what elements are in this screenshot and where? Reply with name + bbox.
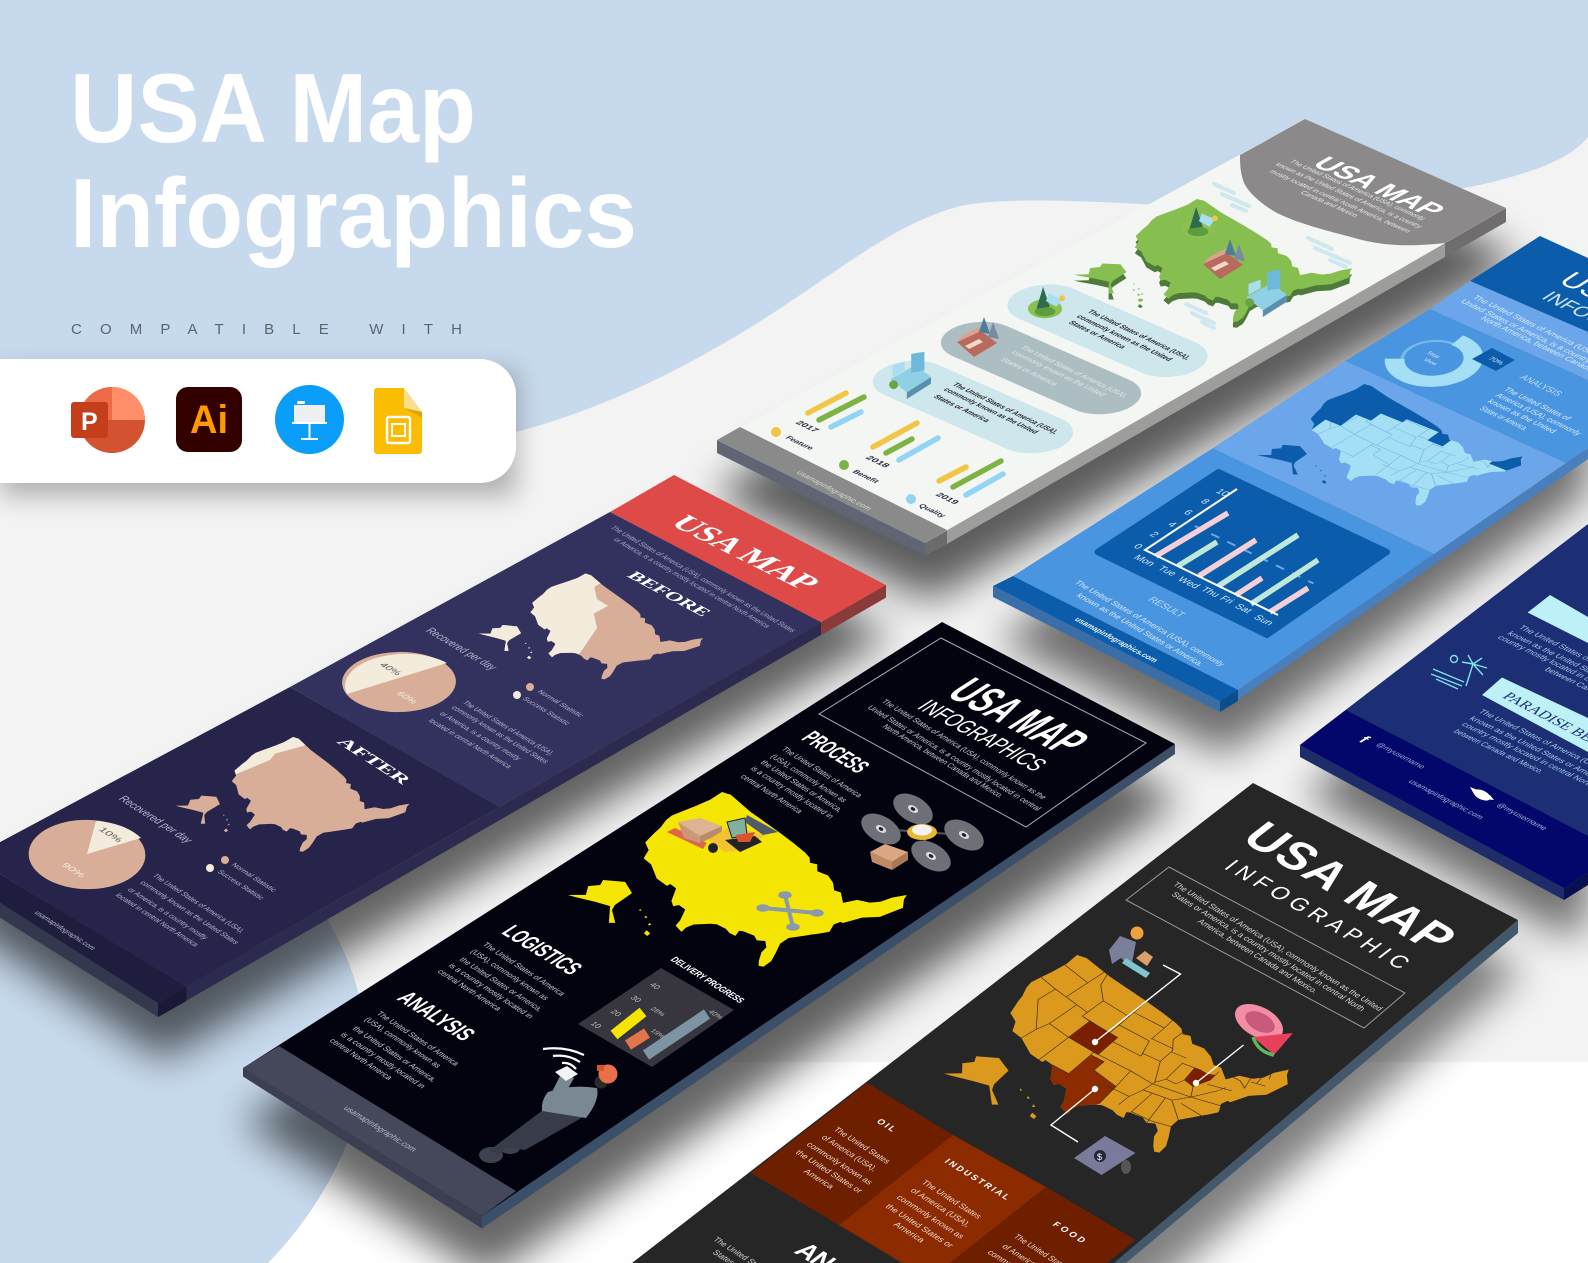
title: Infographics	[70, 158, 637, 268]
legend before	[513, 683, 586, 727]
before paragraph: or America, is a country mostly	[437, 711, 523, 761]
bar chart: yearly bars: 2018	[863, 454, 893, 469]
intro paragraph: The United States of America (USA), commonly known as the United States	[608, 525, 798, 633]
footer social links: @myusername	[1494, 802, 1550, 832]
panel: navy infographic card	[1300, 524, 1588, 938]
process text: (USA), commonly known as	[768, 753, 850, 804]
donut chart: 70%	[1486, 356, 1505, 366]
analysis text	[327, 988, 481, 1090]
logistics text: (USA), commonly known as	[468, 948, 551, 1001]
header paragraph: mostly located in central North America, between	[1267, 169, 1413, 234]
recovered label before: Recovered per day	[422, 626, 501, 672]
heading: USA MAP	[1306, 153, 1452, 220]
panel: oil	[751, 1083, 953, 1225]
icon: small drone	[757, 892, 823, 930]
result text: RESULT	[1145, 596, 1187, 619]
map: before	[478, 574, 703, 680]
logistics text	[435, 922, 588, 1020]
footer band	[0, 870, 186, 1003]
analysis heading and text	[710, 1235, 912, 1263]
before paragraph: located in central North America	[426, 718, 514, 770]
before paragraph	[426, 700, 557, 770]
analysis text: central North America	[327, 1037, 395, 1081]
panel: oil: America	[801, 1167, 837, 1191]
footer band	[717, 427, 947, 543]
legend before: Normal Statistic	[535, 689, 586, 719]
legend after: Success Statistic	[215, 869, 267, 901]
bar chart: result: Thu	[1197, 586, 1222, 599]
after paragraph: commonly known as the United States	[138, 880, 241, 946]
panel: oil: commonly known as	[804, 1140, 875, 1186]
icon: delivery drone	[856, 787, 989, 878]
analysis text: the United States or America,	[350, 1025, 439, 1083]
logistics text: is a country mostly located in	[446, 962, 536, 1020]
bar chart: delivery progress: 19%	[648, 1028, 666, 1040]
footer band: usamapinfographic.com	[794, 470, 874, 512]
footer social links: usamapinfographic.com	[1406, 778, 1486, 821]
panel: industrial: of America (USA),	[908, 1186, 973, 1228]
icon: oil canister	[1074, 1136, 1136, 1175]
legend after: Normal Statistic	[229, 862, 279, 893]
bar chart: delivery progress: 28%	[648, 1006, 666, 1018]
band: header	[1470, 236, 1588, 332]
pill: item two: States or America	[998, 357, 1061, 387]
illustration: person with tablet	[479, 1048, 618, 1163]
intro paragraph: States or America, is a country mostly located in central North	[1169, 890, 1368, 1013]
bar chart: result: 2	[1146, 531, 1161, 539]
top heading box	[1528, 595, 1588, 643]
footer url: usamapinfographic.com	[341, 1104, 419, 1153]
panel: software icons	[0, 359, 516, 496]
bar chart: delivery progress: 40	[647, 981, 663, 991]
panel: oil: The United States	[831, 1125, 893, 1165]
process text: the United States or America,	[758, 759, 846, 813]
analysis text	[1477, 374, 1585, 437]
logistics text: central North America	[435, 968, 504, 1012]
process text: is a country mostly located in	[748, 765, 837, 820]
before paragraph: The United States of America (USA),	[460, 700, 557, 756]
map: green USA	[1066, 195, 1369, 353]
map: yellow USA	[558, 786, 927, 1002]
bar chart: result: Wed	[1174, 576, 1202, 590]
icon: oil canister: $	[1097, 1152, 1102, 1162]
panel: black logistics infographic card	[243, 622, 1180, 1263]
icon: fruit	[1229, 997, 1293, 1055]
pie chart: after: 90%	[59, 861, 88, 879]
panel: dark orange map infographic card	[632, 783, 1523, 1263]
panel: oil: OIL	[874, 1117, 899, 1133]
header band	[610, 475, 886, 622]
icon: palm beach	[1431, 655, 1487, 689]
icon: PowerPoint	[71, 387, 145, 453]
pie chart: after	[4, 806, 170, 903]
intro paragraph: America, between Canada and Mexico.	[1195, 917, 1321, 995]
band: donut	[1345, 309, 1588, 463]
heading: USA MAP	[936, 671, 1101, 762]
intro paragraph	[608, 525, 798, 633]
panel: oil: of America (USA),	[819, 1133, 880, 1173]
bar chart: delivery progress: 30	[628, 994, 644, 1004]
panel: industrial	[839, 1135, 1046, 1263]
after heading: AFTER	[333, 735, 416, 787]
bar chart: result: 0	[1130, 543, 1145, 551]
pill: item three	[857, 352, 1089, 461]
bar chart: yearly bars: 2019	[933, 491, 962, 506]
header paragraph: Canada and Mexico.	[1298, 190, 1363, 219]
bar chart: yearly bars: 2017	[793, 419, 822, 434]
panel: industrial: commonly known as	[894, 1193, 967, 1240]
result text: The United States of America (USA), commonly	[1072, 579, 1228, 668]
bar chart: result: Sun	[1250, 614, 1276, 627]
donut chart: View	[1421, 358, 1439, 367]
after paragraph: or America, is a country mostly	[125, 887, 210, 941]
footer url: usamapinfographics.com	[1072, 616, 1161, 664]
panel: industrial: the United States or	[883, 1202, 956, 1249]
legend after	[206, 856, 279, 901]
pill: item one: commonly known as the United	[1074, 314, 1175, 362]
bar chart: result: 6	[1180, 509, 1195, 517]
analysis text: States or America.	[1477, 405, 1532, 432]
logistics text: the United States or America,	[457, 956, 546, 1013]
footer band	[1300, 710, 1588, 888]
bar chart: delivery progress: 10	[588, 1020, 604, 1030]
icon: Illustrator	[176, 387, 242, 452]
bar chart: result: Fri	[1216, 595, 1236, 606]
clouds	[1186, 184, 1350, 328]
intro paragraph: or America, is a country mostly located in central North America	[611, 537, 773, 629]
analysis text: (USA), commonly known as	[362, 1016, 444, 1069]
pill: item one: The United States of America (USA),	[1085, 309, 1193, 361]
icon: forklift	[667, 815, 778, 853]
analysis text: The United States of America	[374, 1010, 462, 1067]
pill: item two: The United States of America (USA),	[1018, 345, 1131, 399]
legend	[771, 427, 949, 519]
band: intro	[1430, 281, 1588, 380]
analysis text: The United States of	[1501, 386, 1574, 422]
legend: Benefit	[850, 469, 882, 484]
pill: item three: The United States of America (USA),	[950, 382, 1061, 435]
header frame	[819, 638, 1146, 827]
icon: worker	[1109, 926, 1153, 978]
footer url: usamapinfographic.com	[32, 910, 98, 951]
pill: item three: commonly known as the United	[941, 387, 1041, 435]
panel: oil: the United States or	[793, 1148, 865, 1195]
process text: central North America	[738, 773, 806, 815]
bar chart: result: Tue	[1154, 565, 1179, 578]
header paragraph: The United States of America (USA), commonly known as the	[879, 698, 1050, 801]
process text: The United States of America	[779, 745, 865, 799]
panel: industrial: America	[891, 1220, 928, 1244]
logistics text: The United States of America	[480, 941, 568, 997]
before heading: BEFORE	[622, 569, 716, 619]
highlighted state: Ohio	[1181, 1066, 1215, 1090]
panel: industrial: The United States	[919, 1178, 984, 1220]
before paragraph: commonly known as the United States	[449, 705, 551, 765]
pie chart: after: 10%	[96, 826, 125, 843]
header paragraph: known as the United States of America, is a country	[1273, 162, 1425, 229]
analysis text: ANALYSIS	[1516, 374, 1565, 398]
band: map	[1213, 361, 1566, 554]
highlighted state: Colorado	[1066, 1020, 1120, 1055]
panel: food: FOOD	[1050, 1220, 1089, 1245]
pill: item two: commonly known as the United	[1009, 350, 1108, 397]
panel: industrial: INDUSTRIAL	[942, 1157, 1013, 1201]
analysis text: known as the United	[1485, 398, 1560, 435]
bar chart: delivery progress: DELIVERY PROGRESS	[667, 956, 747, 1005]
map: blue USA	[1258, 384, 1522, 506]
analysis text: is a country mostly located in	[338, 1031, 428, 1090]
icon: Illustrator: Ai	[190, 398, 228, 442]
band: result chart	[1013, 448, 1434, 690]
panel: before and after infographic card	[0, 475, 891, 1060]
footer social links: f	[1355, 734, 1374, 746]
bar chart: result: 8	[1197, 498, 1212, 506]
after section	[0, 687, 499, 987]
panel: blue infographic card	[993, 236, 1588, 755]
bar chart: delivery progress: 20	[608, 1008, 624, 1018]
heading	[911, 671, 1101, 775]
header paragraph: North America, between Canada and Mexico.	[880, 723, 1007, 799]
analysis text: ANALYSIS	[391, 988, 481, 1045]
pill: item three: States or America	[931, 394, 993, 424]
compatible with label: COMPATIBLE WITH	[71, 321, 462, 338]
callout lines	[1051, 965, 1244, 1142]
pie chart: before: 40%	[377, 661, 404, 677]
bar chart: result: Mon	[1130, 554, 1157, 568]
process text: PROCESS	[795, 728, 875, 777]
before section	[290, 512, 821, 807]
result text: known as the United States or America.	[1074, 592, 1207, 668]
lower paragraph: between Canada and Mexico.	[1451, 728, 1547, 775]
map: after	[176, 737, 410, 852]
footer social links: @myusername	[1374, 741, 1428, 770]
donut chart	[1372, 324, 1515, 394]
panel: white and green infographic card	[717, 119, 1511, 601]
map: orange USA	[944, 955, 1289, 1153]
after paragraph	[113, 873, 247, 948]
panel: food	[950, 1187, 1136, 1263]
heading: INFOGRAPHICS	[911, 697, 1052, 775]
intro paragraph: The United States of America (USA), commonly known as the United	[1171, 880, 1386, 1013]
icon: PowerPoint: P	[81, 408, 98, 436]
pie chart: before	[318, 639, 481, 725]
title: USA Map	[70, 53, 476, 163]
footer social links	[1355, 734, 1550, 832]
header paragraph: United States or America, is a country mostly located in central	[865, 704, 1044, 812]
heading: USA MAP	[663, 511, 828, 595]
pill: item one	[991, 276, 1224, 385]
bar chart: yearly bars	[793, 393, 1003, 506]
process text	[738, 728, 875, 820]
icon: Google Slides	[374, 388, 422, 454]
pill: item one: States or America	[1066, 320, 1129, 350]
highlighted state: Texas	[1024, 1046, 1130, 1121]
after paragraph: located in central North America	[113, 892, 201, 948]
header band	[1240, 119, 1506, 245]
logistics text: LOGISTICS	[496, 922, 588, 979]
bar chart: result: Sat	[1231, 603, 1254, 615]
pie chart: before: 60%	[394, 690, 420, 705]
intro frame	[1126, 867, 1405, 1028]
legend: Feature	[783, 435, 816, 451]
bar chart: delivery progress: 40%	[706, 1009, 724, 1021]
bar chart: result: 10	[1212, 488, 1232, 499]
heading: INFOGRAPHIC	[1219, 856, 1416, 973]
footer band	[243, 1046, 516, 1216]
band: footer	[993, 576, 1238, 701]
donut chart: Total	[1424, 351, 1441, 360]
recovered label after: Recovered per day	[115, 794, 197, 845]
bar chart: result	[1098, 472, 1387, 635]
pill: item two	[925, 314, 1157, 422]
legend: Quality	[916, 503, 949, 519]
icon: Keynote	[275, 385, 344, 454]
header paragraph: The United States of America (USA), commonly	[1287, 159, 1428, 221]
bar chart: result: 4	[1164, 521, 1179, 529]
heading: USA MAP	[1231, 814, 1467, 961]
legend before: Success Statistic	[520, 696, 573, 727]
after paragraph: The United States of America (USA),	[150, 873, 247, 934]
bar chart: delivery progress	[578, 956, 747, 1067]
title	[70, 53, 637, 268]
